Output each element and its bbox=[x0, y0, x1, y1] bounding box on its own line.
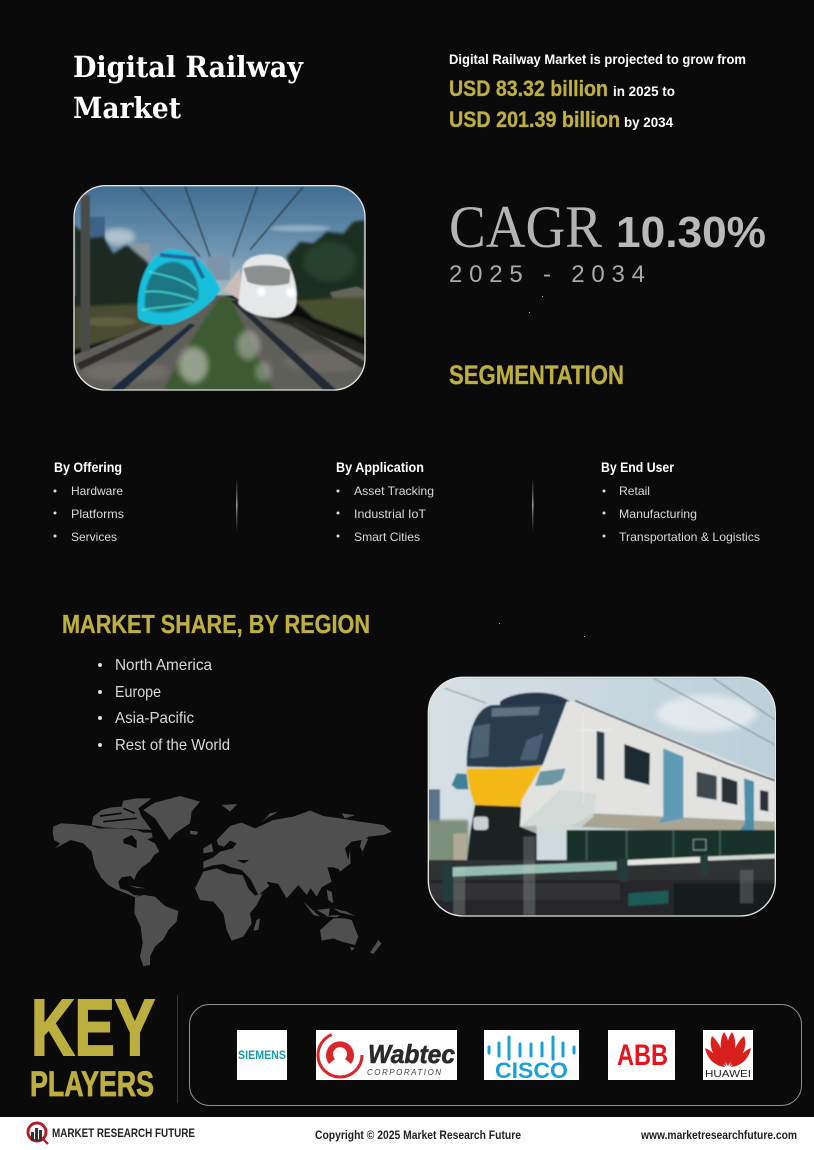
segment list: by end user: Retail bbox=[619, 484, 650, 498]
segment list: by offering: By Offering bbox=[54, 459, 122, 475]
market projection text: in 2025 to bbox=[613, 83, 675, 99]
logo: Wabtec bbox=[316, 1030, 457, 1080]
footer copyright: Copyright © 2025 Market Research Future bbox=[315, 1128, 521, 1142]
segment list: by offering: Platforms bbox=[71, 507, 124, 521]
segment list: by offering: Services bbox=[71, 530, 117, 544]
CAGR figure: 10.30% bbox=[616, 208, 766, 257]
footer bar bbox=[0, 1117, 814, 1150]
market projection text: USD 83.32 billion bbox=[449, 76, 608, 101]
world map bbox=[53, 796, 392, 966]
logo: Cisco bbox=[484, 1030, 579, 1083]
CAGR figure: 2025 - 2034 bbox=[449, 261, 645, 288]
photo: commuter train bbox=[428, 677, 775, 916]
heading: key players: PLAYERS bbox=[30, 1065, 154, 1104]
segment list: by application: Asset Tracking bbox=[354, 484, 434, 498]
logo: Huawei bbox=[703, 1030, 753, 1080]
region list: Rest of the World bbox=[115, 737, 230, 754]
logo: Cisco: CISCO bbox=[495, 1058, 568, 1083]
market projection text: Digital Railway Market is projected to grow from bbox=[449, 51, 746, 67]
segment list: by application bbox=[336, 459, 434, 544]
region list: Asia-Pacific bbox=[115, 710, 194, 727]
title: Market bbox=[73, 91, 182, 125]
segment list: by application: Smart Cities bbox=[354, 530, 420, 544]
logo: Siemens bbox=[237, 1030, 287, 1080]
segment list: by end user: Transportation & Logistics bbox=[619, 530, 760, 544]
market projection text bbox=[449, 51, 746, 132]
logo: Siemens: SIEMENS bbox=[238, 1048, 286, 1062]
panel: key player logos bbox=[190, 1004, 802, 1106]
logo: Huawei: HUAWEI bbox=[705, 1069, 751, 1080]
footer logo bbox=[28, 1123, 48, 1144]
segment list: by offering bbox=[54, 459, 124, 544]
logo: ABB: ABB bbox=[617, 1039, 668, 1072]
photo: train with digital hologram bbox=[74, 186, 365, 390]
segment list: by end user: By End User bbox=[601, 459, 674, 475]
title bbox=[73, 50, 304, 125]
region list: North America bbox=[115, 657, 212, 674]
heading: key players bbox=[30, 983, 155, 1104]
segment list: by end user: Manufacturing bbox=[619, 507, 697, 521]
region list: Europe bbox=[115, 684, 161, 701]
logo: Wabtec: CORPORATION bbox=[367, 1068, 441, 1077]
title: Digital Railway bbox=[73, 50, 304, 84]
market projection text: USD 201.39 billion bbox=[449, 107, 620, 132]
region list bbox=[98, 657, 230, 754]
footer brand: MARKET RESEARCH FUTURE bbox=[52, 1126, 195, 1140]
market projection text: by 2034 bbox=[624, 114, 673, 130]
CAGR figure bbox=[449, 194, 766, 288]
segment list: by end user bbox=[601, 459, 760, 544]
segment list: by offering: Hardware bbox=[71, 484, 123, 498]
segment list: by application: Industrial IoT bbox=[354, 507, 427, 521]
heading: key players: KEY bbox=[31, 983, 155, 1072]
heading: segmentation: SEGMENTATION bbox=[449, 360, 624, 390]
logo: ABB bbox=[608, 1030, 675, 1080]
CAGR figure: CAGR bbox=[449, 194, 602, 260]
stray specks bbox=[499, 296, 585, 637]
heading: market share by region: MARKET SHARE, BY REGION bbox=[62, 609, 370, 639]
segment list: by application: By Application bbox=[336, 459, 424, 475]
logo: Wabtec: Wabtec bbox=[368, 1039, 456, 1069]
